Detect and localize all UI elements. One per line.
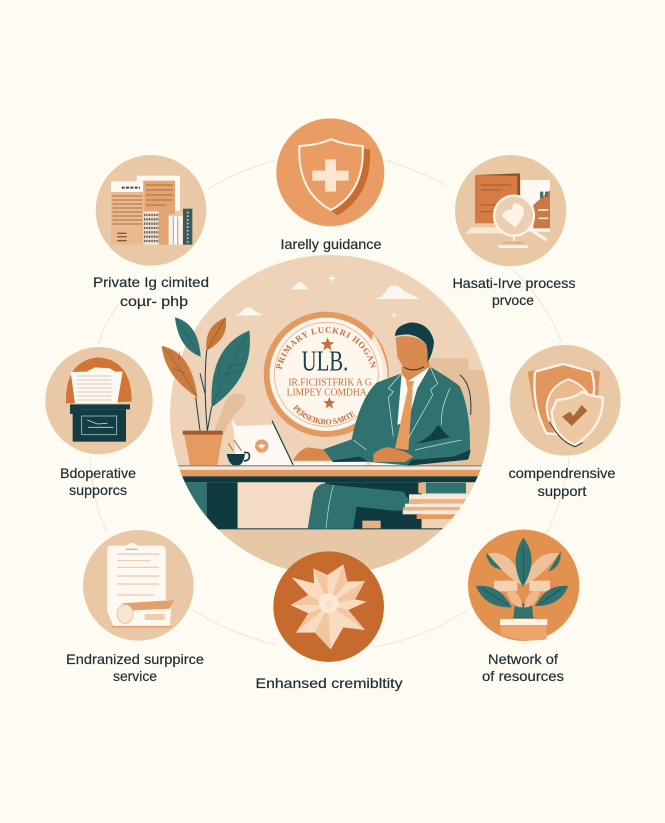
label: right bbox=[508, 465, 616, 499]
label: top right bbox=[452, 275, 576, 308]
tie bbox=[395, 381, 414, 450]
icon: plant network bbox=[468, 530, 579, 641]
label: left: supporcs bbox=[69, 482, 127, 498]
face bbox=[396, 336, 428, 364]
jacket shadows bbox=[332, 425, 471, 466]
label: bottom left: Endranized surppirce bbox=[66, 651, 204, 667]
stamp seal: PRIMARY LUCKRI HOGAN bbox=[276, 327, 376, 370]
leaf: orange left bbox=[162, 346, 197, 397]
icon: file box with paper bbox=[45, 347, 153, 454]
icon: contract with pen bbox=[83, 530, 194, 641]
label: right: compendrensive bbox=[508, 465, 616, 481]
stamp seal: IR.FICIISTFRIK A G bbox=[288, 378, 372, 389]
clouds bbox=[235, 274, 419, 319]
label: top left: Private Ig cimited bbox=[93, 274, 209, 290]
connector ring bbox=[90, 160, 569, 647]
stamp seal bbox=[264, 312, 389, 437]
label: left: Bdoperative bbox=[60, 465, 136, 481]
stamp seal: LIMPEY COMDHA bbox=[287, 387, 367, 398]
label: top right: prvoce bbox=[492, 292, 534, 308]
legs bbox=[308, 483, 410, 529]
leaf: orange upper bbox=[206, 317, 226, 351]
laptop bbox=[232, 420, 406, 465]
chair arm bbox=[460, 375, 471, 415]
label: bottom left bbox=[66, 651, 204, 684]
label: bottom right: of resources bbox=[482, 668, 564, 684]
pot bbox=[184, 434, 223, 465]
hair bbox=[395, 322, 434, 363]
label: left bbox=[60, 465, 136, 498]
lapels bbox=[353, 367, 462, 450]
stamp seal: PERSEIKRO SARTE bbox=[292, 404, 356, 424]
plant bbox=[162, 317, 250, 465]
chair bbox=[427, 358, 493, 467]
stamp seal: ULB. bbox=[302, 346, 348, 378]
label: top right: Hasati-Irve process bbox=[452, 275, 576, 291]
label: bottom left: service bbox=[113, 668, 157, 684]
infographic bbox=[45, 118, 621, 692]
central illustration bbox=[162, 255, 490, 570]
coffee cup bbox=[227, 440, 249, 466]
label: bottom right bbox=[482, 651, 564, 684]
label: bottom right: Network of bbox=[488, 651, 558, 667]
icon: shield with plus bbox=[276, 118, 384, 226]
label: top: Iarelly guidance bbox=[280, 236, 382, 252]
icon: magnifier over documents bbox=[455, 155, 566, 266]
neck bbox=[402, 360, 430, 381]
label: bottom: Enhansed cremibltity bbox=[256, 675, 402, 691]
leaf: teal large bbox=[211, 331, 250, 407]
icon: documents and buildings bbox=[96, 155, 206, 266]
man in suit bbox=[293, 322, 471, 466]
label: right: support bbox=[538, 483, 587, 499]
label: top left bbox=[93, 274, 209, 309]
hands bbox=[293, 447, 413, 462]
suit jacket bbox=[323, 367, 470, 465]
shirt bbox=[397, 367, 430, 425]
icon: crystal flower bbox=[273, 551, 384, 662]
books bbox=[403, 483, 469, 519]
leaf: teal upper bbox=[175, 317, 201, 357]
desk bbox=[178, 465, 482, 570]
label: top left: coµr- phþ bbox=[120, 293, 188, 309]
icon: overlapping shields with check bbox=[510, 345, 621, 456]
central circle background bbox=[170, 255, 490, 575]
